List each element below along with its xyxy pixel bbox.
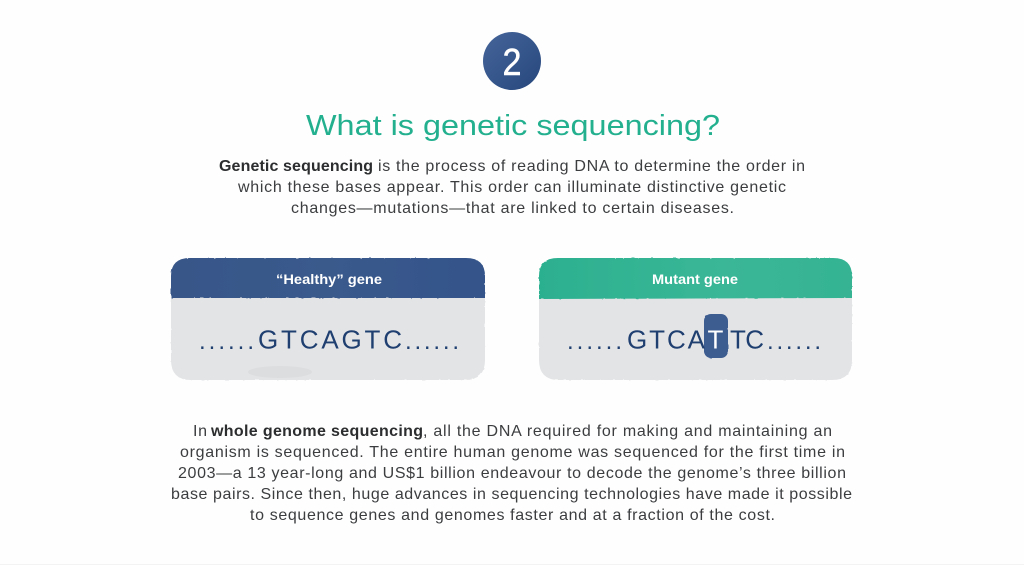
intro paragraph: which these bases appear. This order can illuminate distinctive genetic bbox=[237, 179, 786, 196]
mutant gene sequence: GTCA bbox=[627, 324, 706, 354]
step number badge bbox=[483, 32, 541, 90]
step number badge: 2 bbox=[502, 42, 522, 84]
healthy gene card body bbox=[171, 296, 485, 380]
whole genome paragraph: organism is sequenced. The entire human genome was sequenced for the first time in bbox=[180, 444, 845, 461]
mutant gene sequence: ...... bbox=[767, 328, 821, 355]
healthy gene sequence: ...... bbox=[405, 328, 459, 355]
whole genome paragraph: whole genome sequencing bbox=[210, 423, 423, 440]
healthy gene sequence bbox=[199, 324, 459, 355]
healthy gene label: “Healthy” gene bbox=[276, 271, 382, 287]
whole genome paragraph: 2003—a 13 year-long and US$1 billion endeavour to decode the genome’s three billion bbox=[178, 465, 846, 482]
panel: healthy gene bbox=[171, 258, 485, 380]
intro paragraph: Genetic sequencing bbox=[219, 158, 373, 175]
whole genome paragraph: base pairs. Since then, huge advances in sequencing technologies have made it possible bbox=[171, 486, 852, 503]
intro paragraph: changes—mutations—that are linked to certain diseases. bbox=[291, 200, 734, 217]
healthy gene header bbox=[171, 258, 485, 298]
healthy gene sequence: GTCAGTC bbox=[258, 324, 402, 354]
mutant gene sequence: T bbox=[708, 324, 724, 354]
whole genome paragraph: , all the DNA required for making and maintaining an bbox=[423, 423, 832, 440]
title: What is genetic sequencing? bbox=[306, 110, 720, 142]
intro paragraph: is the process of reading DNA to determine the order in bbox=[378, 158, 805, 175]
whole genome paragraph: In bbox=[193, 423, 207, 440]
panel: mutant gene bbox=[539, 258, 852, 380]
intro paragraph bbox=[219, 158, 805, 217]
mutant gene label: Mutant gene bbox=[652, 271, 738, 287]
whole genome paragraph bbox=[171, 423, 852, 524]
mutant gene sequence: TC bbox=[730, 324, 764, 354]
healthy gene paint smudge bbox=[248, 366, 312, 378]
whole genome paragraph: to sequence genes and genomes faster and at a fraction of the cost. bbox=[250, 507, 775, 524]
mutant gene sequence bbox=[567, 324, 821, 355]
footer edge bbox=[0, 564, 1024, 565]
healthy gene sequence: ...... bbox=[199, 328, 254, 355]
mutation highlight bbox=[704, 314, 728, 358]
mutant gene header bbox=[539, 258, 852, 299]
mutant gene sequence: ...... bbox=[567, 328, 622, 355]
mutant gene card body bbox=[539, 296, 852, 380]
